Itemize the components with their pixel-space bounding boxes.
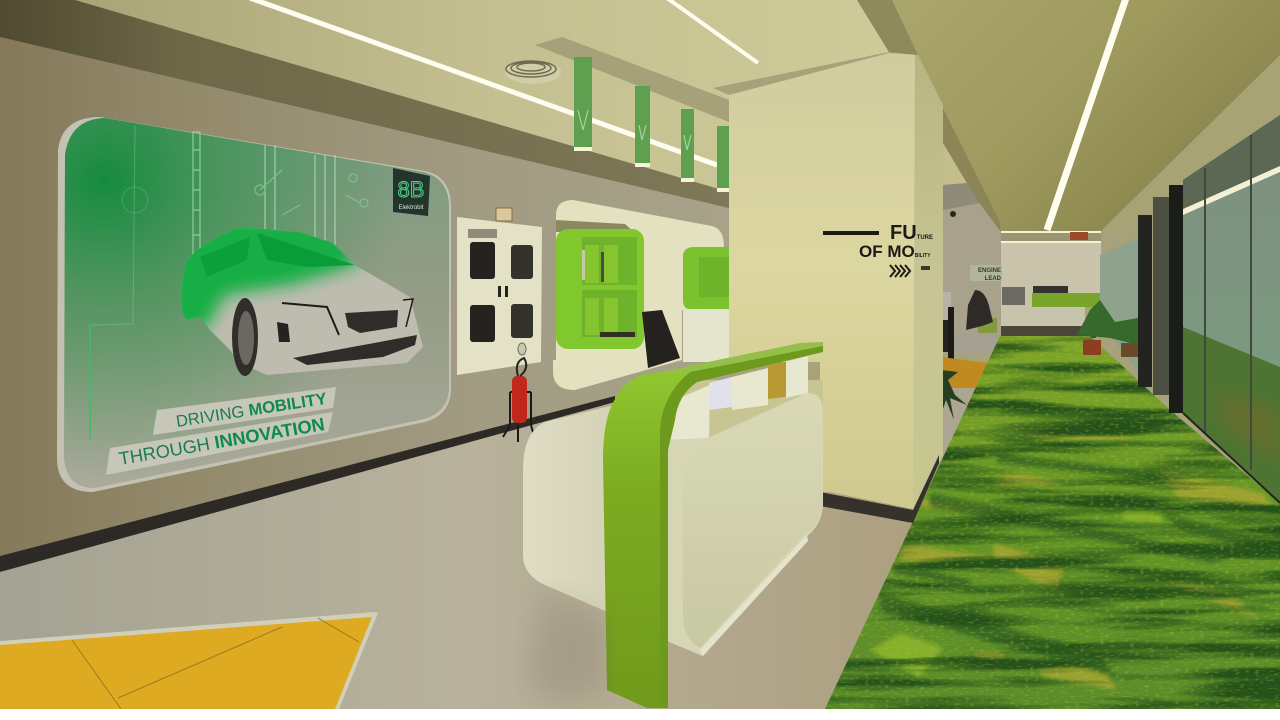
desk shadow bbox=[525, 590, 606, 705]
yellow floor strip far bbox=[941, 357, 988, 388]
tagline: THROUGH INNOVATION bbox=[117, 414, 326, 469]
logo badge bbox=[393, 168, 430, 216]
left wall bbox=[0, 37, 729, 558]
tagline bbox=[106, 387, 336, 475]
ceiling vent bbox=[505, 60, 561, 84]
ceiling recess strip bbox=[535, 37, 729, 122]
fire extinguisher bbox=[503, 343, 534, 442]
wall lettering: OF MOBILITY bbox=[859, 242, 931, 261]
column bbox=[729, 0, 943, 523]
corridor background: LEAD bbox=[985, 276, 1002, 282]
wall niche with shelves bbox=[553, 200, 729, 390]
corridor background: ENGINE bbox=[978, 268, 1001, 274]
tagline: DRIVING MOBILITY bbox=[175, 390, 328, 431]
green carpet bbox=[825, 336, 1280, 709]
wall lettering bbox=[823, 222, 933, 277]
skirting bbox=[0, 396, 615, 572]
logo badge: Elektrobit bbox=[398, 205, 424, 211]
plant small bbox=[941, 370, 967, 420]
floor bbox=[0, 398, 915, 709]
corridor background bbox=[943, 108, 1138, 372]
logo badge: 8B bbox=[398, 177, 424, 202]
yellow floor inlay bbox=[0, 612, 378, 709]
glass partition wall bbox=[1138, 115, 1280, 503]
electrical cabinet bbox=[457, 217, 542, 375]
office chair bbox=[642, 310, 729, 368]
pendant lights bbox=[574, 57, 729, 192]
wall panel: car mural bbox=[57, 117, 451, 492]
white strip at bottom bbox=[0, 709, 1280, 720]
circuit graphic bbox=[90, 125, 368, 440]
reception desk bbox=[523, 342, 823, 708]
sign above cabinet bbox=[496, 208, 512, 221]
car body bbox=[180, 227, 423, 376]
potted plants bbox=[1077, 300, 1138, 357]
floor beside carpet bbox=[940, 388, 980, 465]
green countertop band bbox=[603, 342, 823, 708]
seating group bbox=[941, 290, 999, 377]
wall header shadow band bbox=[0, 0, 729, 208]
ceiling light strips bbox=[250, 0, 1126, 230]
wall lettering: FUTURE bbox=[890, 222, 933, 244]
